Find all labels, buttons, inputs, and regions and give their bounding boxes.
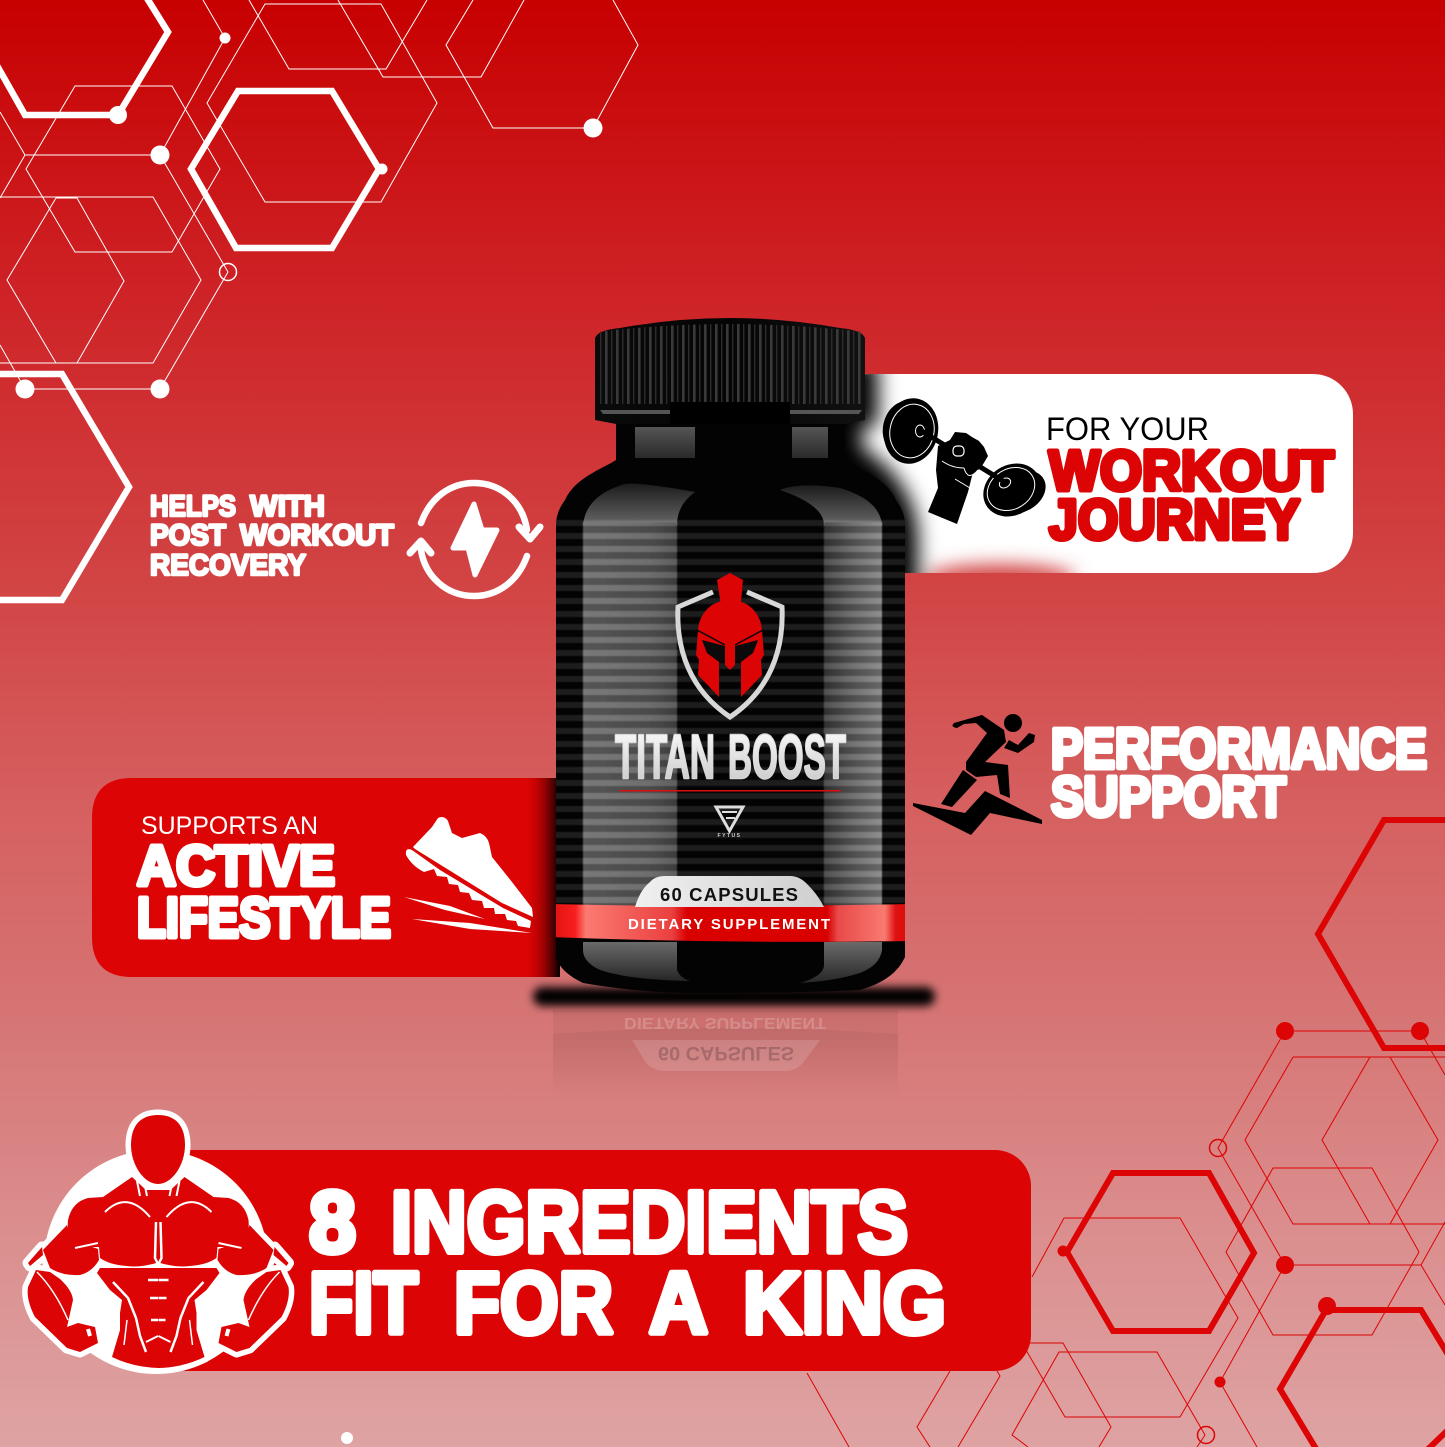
icon: energy bolt with recycle arrows: [410, 483, 540, 596]
text: support: SUPPORT: [1051, 765, 1286, 829]
text: fit for a king: [309, 1255, 946, 1352]
logo: fytus triangle: [716, 807, 743, 839]
red rule: [619, 790, 841, 792]
text: active: ACTIVE: [137, 834, 335, 898]
bottle cap: [595, 318, 865, 424]
bottle reflection: 60 CAPSULES: [658, 1042, 794, 1063]
logo: spartan helmet shield: [678, 573, 782, 717]
bottle body: [550, 420, 910, 1000]
red label band: [550, 904, 910, 942]
text: fit for a king: FOR: [454, 1255, 613, 1352]
text: fit for a king: KING: [743, 1255, 946, 1352]
text: workout: WORKOUT: [1049, 439, 1334, 503]
icon: fist holding dumbbell: [878, 393, 1053, 527]
text: lifestyle: LIFESTYLE: [137, 886, 391, 950]
label: 60 capsules: [635, 876, 824, 907]
small white dot at page bottom: [341, 1432, 353, 1444]
icon: running shoe: [404, 817, 533, 933]
banner: 8 ingredients fit for a king: [28, 1115, 1031, 1374]
bottle reflection: [553, 1010, 898, 1110]
text: for your: FOR YOUR: [1046, 411, 1209, 447]
logo: fytus triangle: FYTUS: [718, 833, 741, 839]
text: helps with post workout recovery: WORKOUT: [240, 519, 394, 552]
bottle reflection: DIETARY SUPPLEMENT: [624, 1014, 826, 1031]
text: fit for a king: FIT: [309, 1255, 418, 1352]
callout: post workout recovery: [150, 483, 540, 596]
product bottle: [550, 318, 910, 1000]
text: 8 ingredients: INGREDIENTS: [391, 1174, 908, 1271]
text: helps with post workout recovery: HELPS: [150, 490, 236, 523]
callout: performance support: [913, 714, 1427, 835]
text: titan boost: BOOST: [728, 723, 846, 792]
text: 8 ingredients: 8: [309, 1174, 356, 1271]
text: helps with post workout recovery: [150, 490, 394, 582]
hexagon network top left: [0, 0, 638, 600]
text: dietary supplement: DIETARY SUPPLEMENT: [628, 916, 830, 933]
bottle ground shadow: [533, 987, 935, 1006]
panel: active lifestyle: [92, 778, 560, 977]
text: helps with post workout recovery: RECOVERY: [150, 549, 306, 582]
icon: muscular bodybuilder: [28, 1115, 289, 1374]
icon: sprinting figure: [913, 714, 1042, 835]
hexagon network bottom right: [807, 820, 1445, 1447]
panel: workout journey: [845, 374, 1353, 573]
label: 60 capsules: 60 CAPSULES: [660, 884, 798, 905]
text: titan boost: TITAN: [615, 723, 715, 792]
text: helps with post workout recovery: POST: [150, 519, 226, 552]
text: helps with post workout recovery: WITH: [250, 490, 325, 523]
text: supports an: SUPPORTS AN: [141, 812, 318, 840]
text: fit for a king: A: [649, 1255, 708, 1352]
text: journey: JOURNEY: [1049, 488, 1300, 552]
